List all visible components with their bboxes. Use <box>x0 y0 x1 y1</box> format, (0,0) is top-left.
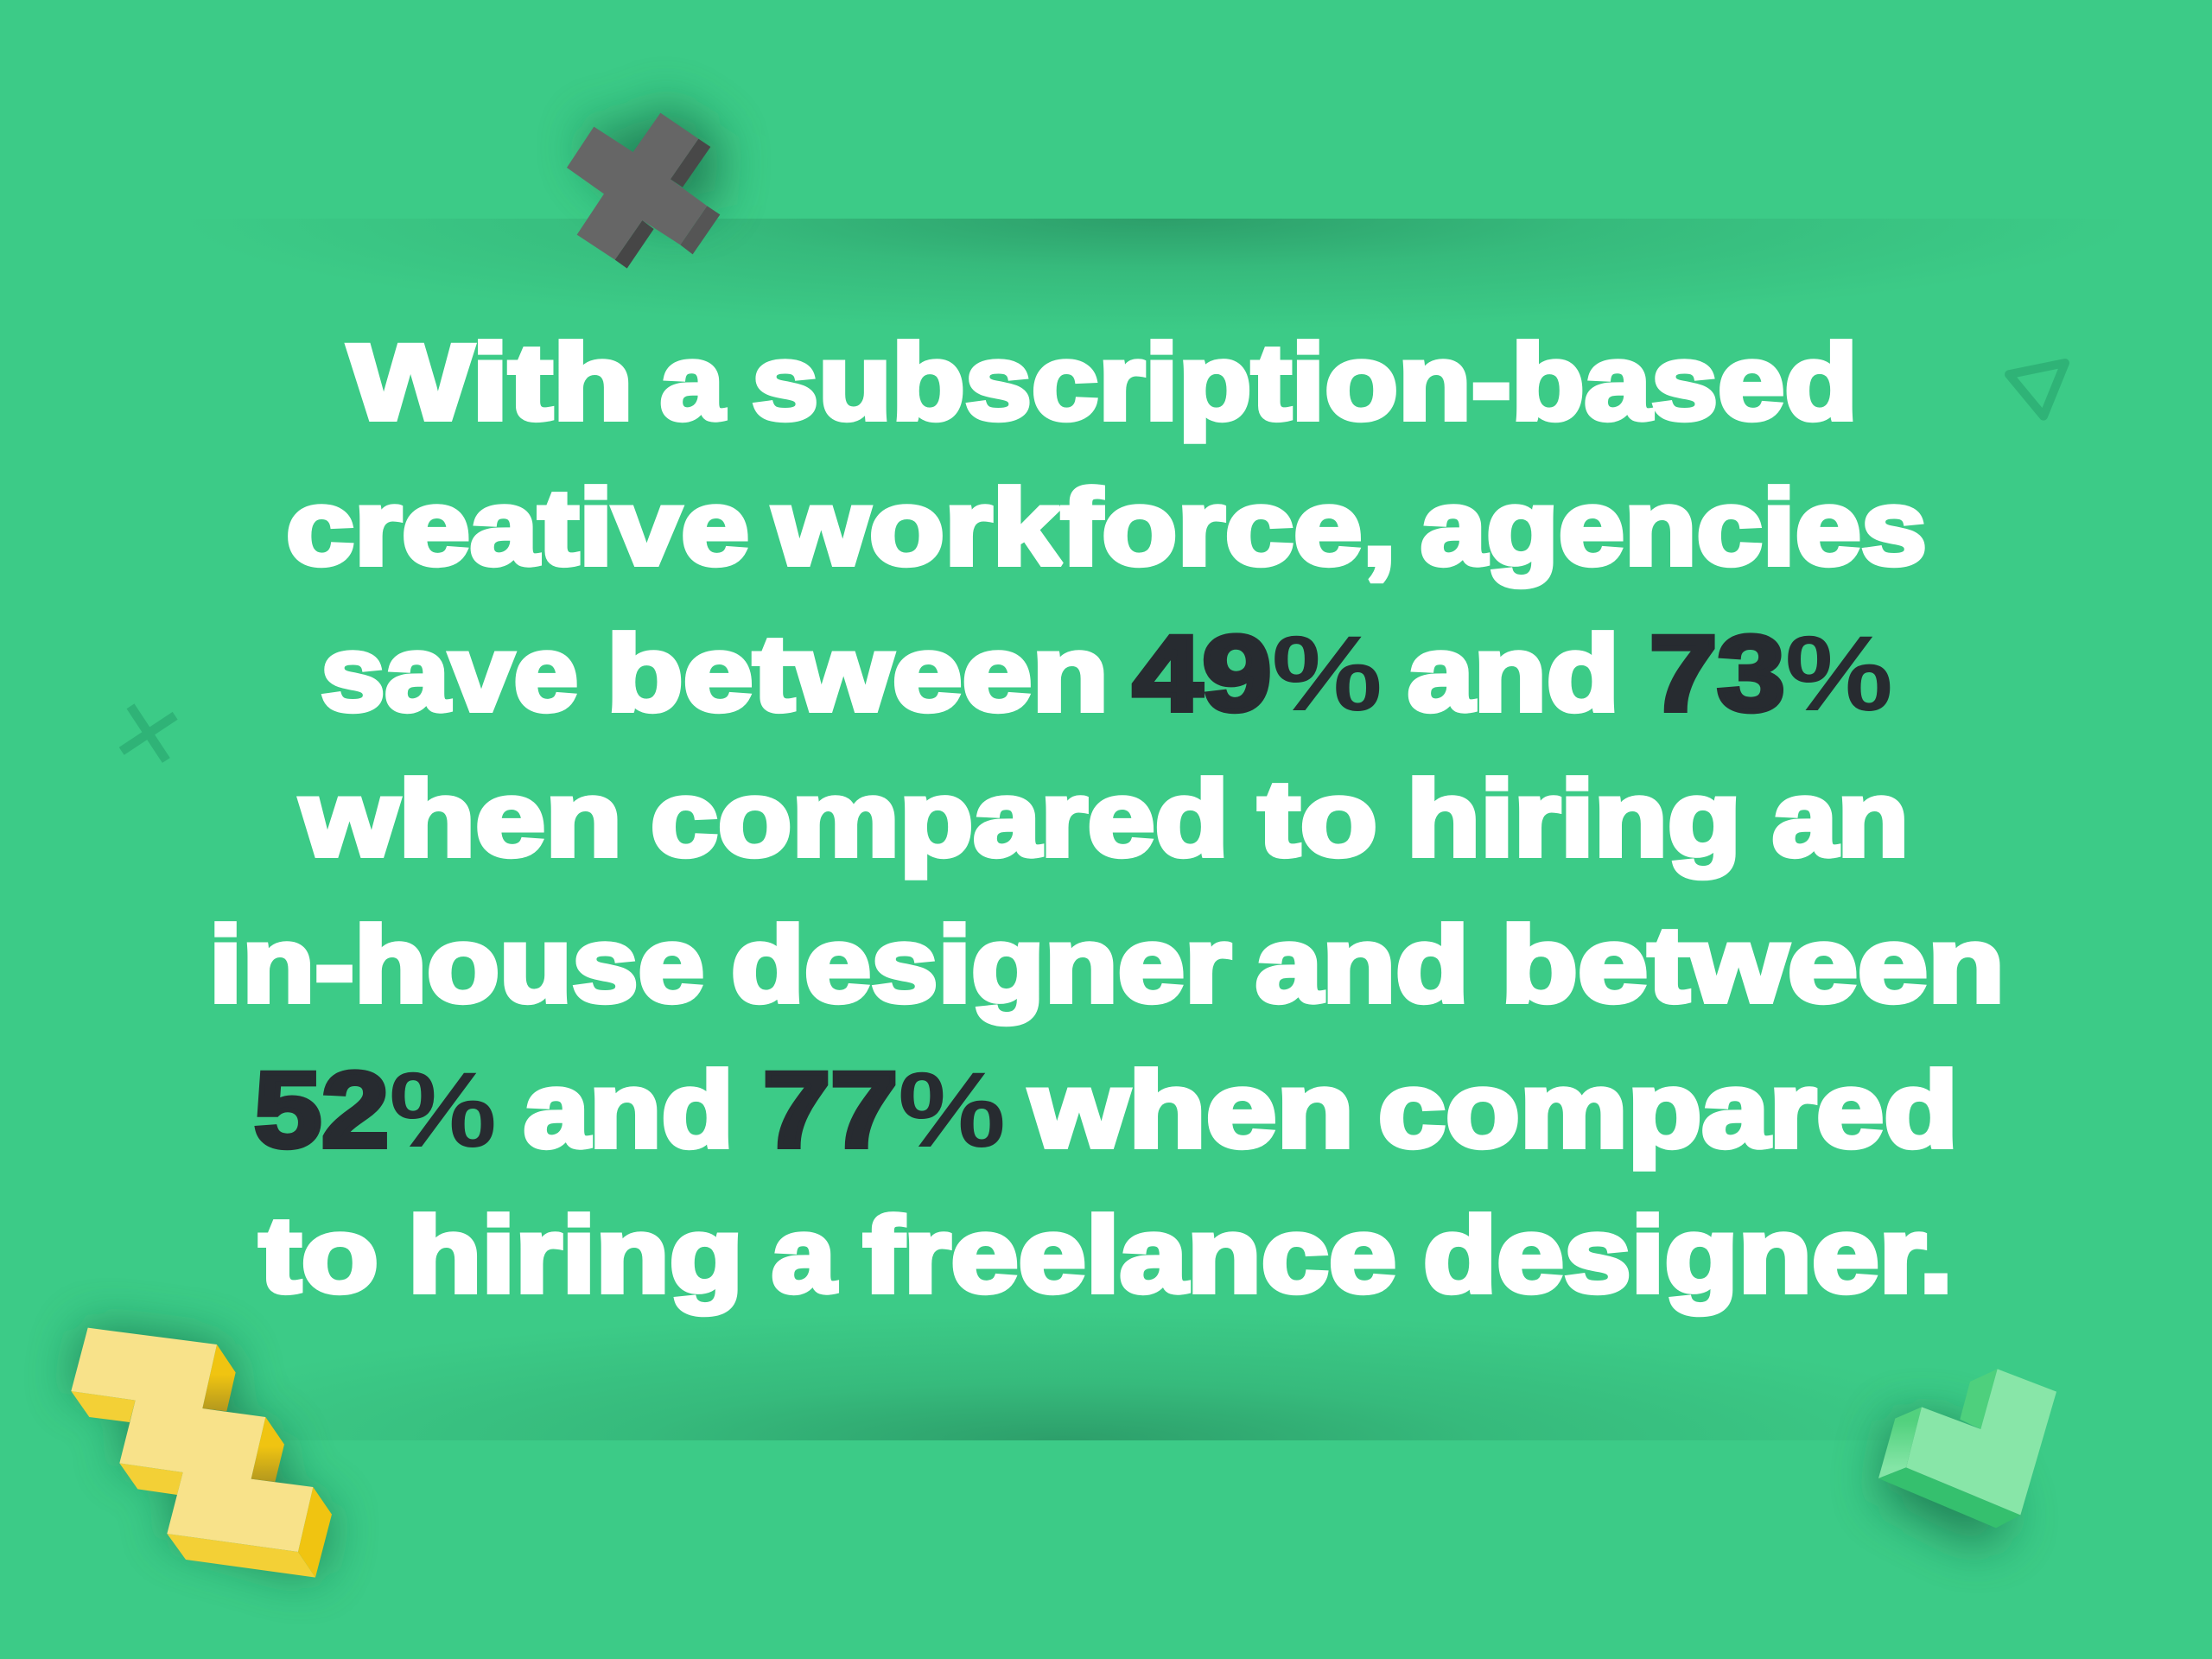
line 7: designer. <box>1423 1196 1953 1315</box>
line 2: creative <box>286 468 749 588</box>
line 7: a <box>772 1196 836 1315</box>
line 3: and <box>1408 614 1619 734</box>
icon: triangle outline <box>2009 363 2065 416</box>
line 5: in-house <box>209 906 704 1025</box>
line 3: 73% <box>1649 614 1893 734</box>
top shadow band <box>442 219 1873 301</box>
line 5 <box>209 906 2005 1025</box>
line 4: to <box>1258 760 1377 879</box>
line 4: compared <box>651 760 1229 879</box>
line 7: to <box>259 1196 378 1315</box>
icon: small x mark <box>122 706 175 760</box>
line 1: subscription-based <box>752 323 1858 442</box>
line 2 <box>286 468 1927 588</box>
headline text block <box>209 323 2005 1315</box>
line 7: freelance <box>863 1196 1396 1315</box>
line 6: 77% <box>763 1051 1006 1170</box>
line 3: save <box>321 614 578 734</box>
line 6 <box>254 1051 1958 1170</box>
line 6: 52% <box>254 1051 497 1170</box>
line 6: and <box>524 1051 734 1170</box>
icon: grey 3D cross <box>567 101 720 269</box>
line 3: between <box>607 614 1109 734</box>
line 6: when <box>1029 1051 1354 1170</box>
line 5: and <box>1255 906 1469 1025</box>
line 6: compared <box>1378 1051 1958 1170</box>
line 4 <box>300 760 1909 879</box>
line 3: 49% <box>1133 614 1382 734</box>
line 4: when <box>300 760 622 879</box>
line 1 <box>348 323 1858 442</box>
line 3 <box>321 614 1893 734</box>
line 4: hiring <box>1407 760 1741 879</box>
bottom shadow band <box>365 1345 1759 1440</box>
icon: green 3D L block <box>1878 1369 2056 1547</box>
line 2: workforce, <box>772 468 1396 588</box>
icon: yellow 3D zigzag block <box>71 1328 332 1578</box>
line 2: agencies <box>1421 468 1927 588</box>
line 7 <box>259 1196 1953 1315</box>
line 7: hiring <box>408 1196 743 1315</box>
line 4: an <box>1772 760 1909 879</box>
line 5: between <box>1501 906 2005 1025</box>
line 1: a <box>660 323 725 442</box>
line 5: designer <box>731 906 1231 1025</box>
line 1: With <box>348 323 633 442</box>
